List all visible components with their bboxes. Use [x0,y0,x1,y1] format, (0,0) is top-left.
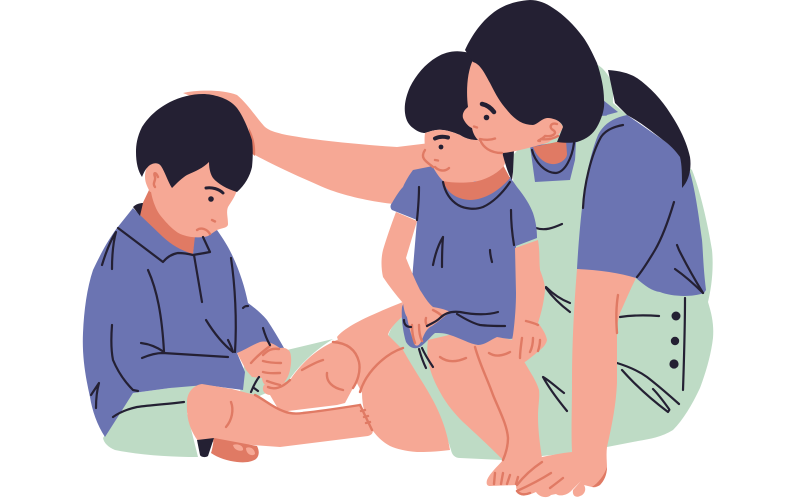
mother: thigh [337,302,450,452]
girl: facial features [423,137,449,171]
girl: face [423,130,505,183]
mother: apron buttons [669,312,680,369]
mother: apron strap over shoulder [574,113,627,208]
boy [83,94,373,462]
mother: knee crease [360,348,403,392]
boy: face [150,150,237,237]
boy: front leg [187,384,373,447]
mother: clothing fold lines [532,125,703,412]
girl: neck [443,165,510,200]
boy: ear [145,163,172,192]
girl: legs [427,330,542,486]
mother: hair [465,0,604,143]
boy: foot under leg [197,438,259,462]
boy: neck [138,190,196,254]
boy: shirt fold lines [91,228,270,417]
boy: bent back leg [263,339,360,412]
mother: hair piece behind neck [502,150,514,180]
mother: green apron dress [388,65,713,460]
boy: hand on knee [237,342,291,388]
girl: blue shirt [390,166,537,348]
boy: facial features [197,188,223,234]
boy: green shorts [103,383,210,457]
mother: face [463,60,563,153]
mother: body [183,65,713,460]
mother: neck and collar [530,140,580,182]
girl: hair [405,51,490,141]
mother: supporting arm and hand [516,269,636,497]
mother: ponytail [608,70,691,188]
mother: blue sleeve [577,100,706,296]
boy: collar patch [133,203,143,216]
boy: blue shirt [83,208,284,437]
mother: reaching arm and hand [183,91,440,205]
boy: hair [136,94,253,192]
girl: right arm and hand on knee [512,240,547,363]
mother: head [463,0,604,180]
mother: facial features [474,104,558,153]
boy: green shorts behind hand [240,339,333,397]
boy: knee creases [302,342,360,390]
girl: left arm and hand on dress [382,212,450,346]
girl [382,51,547,486]
girl: shirt lines [404,182,514,368]
